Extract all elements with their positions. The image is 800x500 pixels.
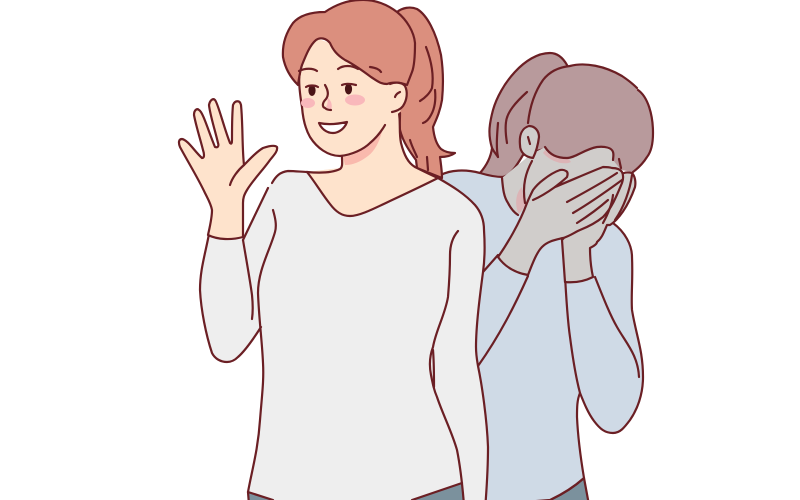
figure: waving woman bbox=[179, 0, 488, 500]
waving woman eyebrows bbox=[299, 66, 358, 71]
shy woman ear detail bbox=[528, 137, 530, 144]
waving woman jaw bbox=[299, 72, 385, 156]
waving woman neck shadow bbox=[343, 128, 383, 165]
waving woman neckline bbox=[307, 113, 438, 216]
waving woman ear detail bbox=[395, 92, 400, 97]
shy woman back hand bbox=[562, 172, 635, 282]
shy woman back hand finger line bbox=[615, 175, 632, 220]
shy woman cheek shadow bbox=[516, 150, 571, 214]
shy woman front hand bbox=[498, 167, 623, 275]
waving woman eyes bbox=[306, 84, 356, 96]
shy woman cheek line bbox=[524, 161, 532, 203]
waving woman sweater bbox=[200, 168, 488, 500]
shy woman arm lines bbox=[478, 240, 639, 393]
shy woman ear bbox=[520, 126, 539, 158]
waving woman blush bbox=[301, 94, 365, 110]
shy woman ponytail bbox=[480, 53, 575, 177]
waving woman ear bbox=[390, 83, 407, 112]
shy woman face outline bbox=[502, 178, 518, 215]
waving woman jeans bbox=[248, 483, 464, 500]
waving woman palm crease bbox=[230, 165, 244, 185]
shy woman face bbox=[502, 147, 622, 215]
waving woman ponytail strands bbox=[410, 47, 435, 170]
shy woman jeans bbox=[550, 478, 589, 500]
waving woman raised hand bbox=[179, 99, 277, 239]
waving woman face bbox=[299, 38, 407, 156]
waving woman neck and chest bbox=[307, 100, 438, 216]
waving woman ponytail bbox=[395, 8, 455, 178]
waving woman collar bbox=[307, 157, 342, 173]
waving woman mouth bbox=[319, 122, 347, 133]
shy woman hair bbox=[528, 64, 653, 172]
shy woman ponytail strands bbox=[492, 92, 527, 157]
waving woman nose bbox=[323, 85, 331, 110]
waving woman bang line bbox=[370, 67, 381, 72]
shy woman sweater body bbox=[441, 171, 643, 500]
figure: shy woman hiding her face bbox=[441, 53, 653, 500]
waving woman hair bbox=[283, 0, 415, 85]
shy woman finger lines bbox=[533, 173, 622, 223]
